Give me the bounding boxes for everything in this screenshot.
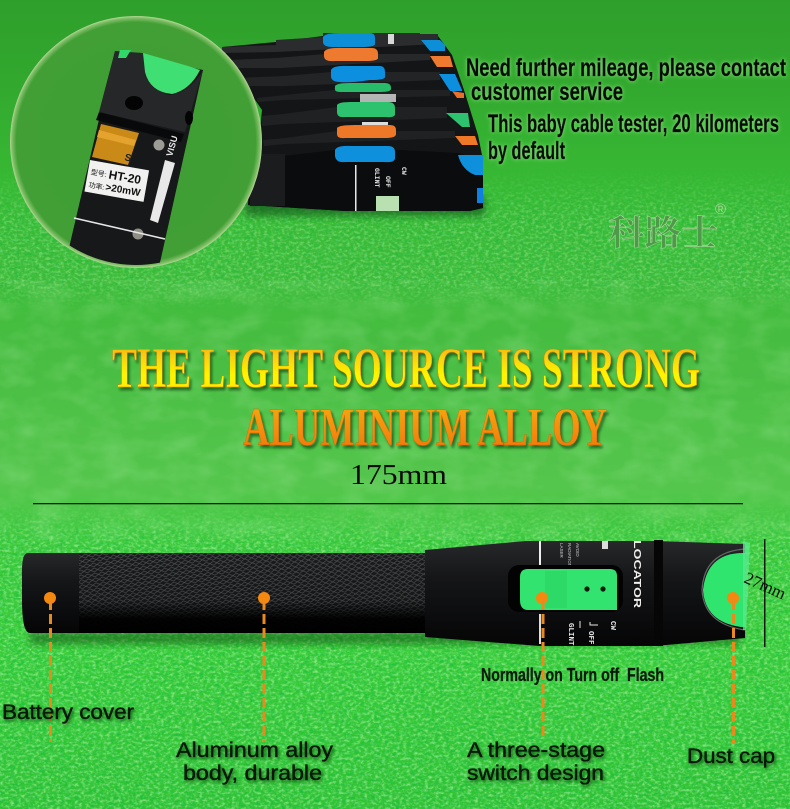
- tester 6 orange: [263, 122, 478, 146]
- model text: 型号:: [90, 167, 107, 179]
- small print on head: RADIATION: [567, 543, 572, 567]
- zoomed detail circle: [10, 16, 262, 285]
- callout lines and dots: [44, 592, 739, 744]
- subheading: aluminium alloy: ALUMINIUM ALLOY: [243, 397, 607, 457]
- logo mark: [608, 201, 726, 256]
- mileage note: [466, 54, 786, 165]
- registered mark: ®: [715, 201, 726, 218]
- label: aluminum alloy body: body, durable: [183, 762, 322, 785]
- screws: [154, 140, 164, 150]
- diameter dimension: [741, 539, 789, 647]
- green cap scoop: [143, 53, 200, 94]
- white ring line: [74, 218, 165, 239]
- white model label: >20mW: [104, 182, 142, 199]
- tester 7 blue front: [248, 146, 483, 211]
- switch position print: [566, 621, 616, 646]
- switch modes caption: Normally on Turn off Flash: [481, 665, 664, 685]
- length value: 175mm: [350, 459, 447, 491]
- white model label: [84, 160, 149, 202]
- switch position print: CW: [608, 621, 616, 631]
- small print on head: AVOID: [575, 543, 580, 557]
- label: aluminum alloy body: [176, 739, 334, 785]
- stack base: [222, 36, 483, 211]
- switch print: CW: [400, 167, 407, 175]
- battery cover: [22, 553, 80, 633]
- diameter value: 27mm: [741, 568, 789, 603]
- tester shadow: [245, 196, 485, 216]
- diameter line: [764, 539, 766, 647]
- part labels: [2, 701, 775, 785]
- collar: [96, 112, 184, 142]
- callout: body dot: [258, 592, 270, 741]
- switch print: GLINT: [373, 168, 380, 188]
- logo text: 科路士: [608, 206, 718, 256]
- close-up tester: [70, 50, 203, 265]
- green slide switch: [508, 565, 623, 612]
- switch print: [373, 167, 407, 188]
- small print on head: LASER: [559, 543, 564, 559]
- callout: cap dot: [727, 592, 739, 744]
- long tester product: [22, 540, 750, 646]
- label: battery cover: Battery cover: [2, 701, 134, 724]
- knurled body: [79, 553, 426, 633]
- small print on head: [559, 543, 580, 567]
- white model label: HT-20: [108, 168, 142, 187]
- callout: battery cover dot: [44, 592, 56, 742]
- cap holes: [125, 96, 143, 110]
- switch position print: GLINT: [566, 623, 574, 646]
- brand text: VISU: [164, 135, 180, 158]
- callout: switch dot: [536, 592, 548, 738]
- tester 3 blue: [238, 66, 462, 91]
- white model label: 功率:: [88, 180, 105, 192]
- vertical white strip: [150, 160, 175, 223]
- row of seven colored testers: [222, 33, 485, 216]
- label: aluminum alloy body: Aluminum alloy: [176, 739, 334, 762]
- tester 2 orange: [230, 48, 453, 68]
- label: switch design: A three-stage: [467, 739, 605, 762]
- tester 4 green: [257, 83, 464, 102]
- tester 1 blue: [222, 33, 445, 53]
- note line 4: by default: [488, 137, 565, 165]
- label: dust cap: Dust cap: [687, 745, 775, 768]
- switch position print: OFF: [586, 631, 594, 645]
- close-up tester: S: [123, 152, 133, 165]
- tester 5 green: [262, 102, 470, 127]
- gold sticker: [92, 124, 139, 165]
- circle disc: [10, 16, 262, 268]
- length line: [33, 503, 743, 504]
- switch print: OFF: [384, 176, 391, 188]
- head section: [425, 541, 745, 646]
- note line 2: customer service: [471, 78, 623, 106]
- label: switch design: [467, 739, 605, 785]
- locator text: LOCATOR: [631, 540, 643, 609]
- label: switch design: switch design: [467, 762, 604, 785]
- green dust cap: [703, 553, 745, 627]
- pen shadow: [30, 632, 740, 644]
